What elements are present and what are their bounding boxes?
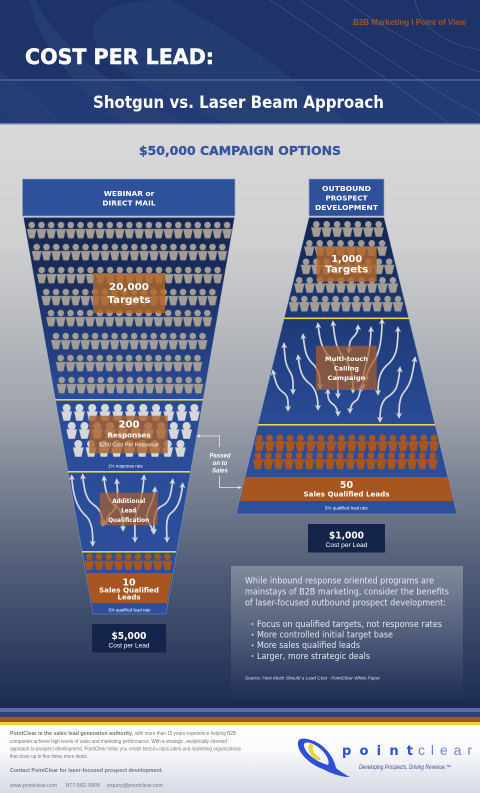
callout: 1,000 targets: 1,000 — [331, 254, 362, 265]
bullet list: Focus on qualified targets, not response rates — [257, 620, 442, 630]
callout: additional lead qualification — [100, 493, 158, 525]
label: B2B Marketing: B2B Marketing I Point of View — [353, 18, 467, 27]
subtitle: Shotgun vs. Laser Beam Approach — [93, 93, 384, 113]
about text: that close up to five times more deals. — [10, 754, 88, 760]
title: COST PER LEAD: — [25, 45, 214, 70]
heading: campaign options: $50,000 CAMPAIGN OPTIONS — [139, 144, 341, 158]
contact line: Contact PointClear for laser-focused prospect development. — [10, 768, 164, 774]
bullet list — [252, 620, 442, 662]
page background — [0, 124, 480, 714]
bullet list: More controlled initial target base — [257, 630, 393, 640]
band: 10 sales qualified leads — [86, 573, 172, 603]
bullet list: More sales qualified leads — [257, 641, 360, 651]
callout: additional lead qualification: Lead — [121, 508, 136, 514]
about text: PointClear is the sales lead generation authority, — [10, 731, 134, 737]
panel: recommendation text — [231, 566, 463, 698]
callout: additional lead qualification: Qualification — [108, 517, 149, 524]
panel: outbound prospect development funnel — [236, 179, 457, 514]
callout: 200 responses — [89, 416, 168, 453]
callout: multi-touch calling campaign: Campaign — [328, 374, 366, 382]
contact details: www.pointclear.com — [10, 783, 57, 789]
funnel header: webinar: WEBINAR or — [104, 189, 155, 198]
footer — [0, 700, 480, 793]
qualification arrows — [72, 475, 183, 545]
callout: 20,000 targets: 20,000 — [109, 282, 149, 293]
funnel header: webinar: DIRECT MAIL — [102, 198, 156, 208]
about text — [10, 731, 241, 760]
callout: passed on to sales: Sales — [212, 468, 228, 474]
about text: companies achieve high levels of sales and marketing performance. With a strategic, analytically oriented — [10, 739, 227, 745]
band: 10 sales qualified leads: 10 — [122, 578, 136, 588]
about text: with more than 15 years experience helping B2B — [135, 731, 237, 737]
callout: 200 responses: Responses — [108, 432, 150, 440]
funnel header: outbound: OUTBOUND — [322, 185, 372, 193]
callout: multi-touch calling campaign — [316, 346, 377, 390]
callout: 200 responses: 200 — [118, 420, 140, 430]
callout: multi-touch calling campaign: Multi-touch — [325, 355, 368, 363]
cost box: $5,000 — [92, 624, 166, 652]
contact details: inquiry@pointclear.com — [107, 783, 163, 789]
qualified crowd — [84, 553, 172, 571]
callout: 20,000 targets — [93, 273, 165, 313]
funnel header: webinar — [22, 179, 235, 216]
qualified rate: 5% qualified lead rate — [325, 506, 368, 512]
band: 50 sales qualified leads — [240, 477, 453, 501]
intro text: While inbound response oriented programs are — [245, 576, 434, 586]
funnel body — [236, 218, 457, 514]
logo wordmark: clear — [418, 742, 472, 758]
callout: passed on to sales: on to — [213, 461, 228, 467]
target crowd — [27, 222, 232, 395]
callout: 1,000 targets — [317, 247, 377, 282]
qualified rate: 5% qualified lead rate — [108, 608, 151, 614]
band: 50 sales qualified leads: 50 — [340, 480, 353, 491]
contact details — [10, 783, 163, 789]
header banner — [0, 0, 480, 124]
logo wordmark: point — [342, 744, 413, 759]
callout: 200 responses: $250 Cost Per Response — [99, 442, 159, 448]
band: 10 sales qualified leads: Leads — [118, 594, 140, 602]
callout: 20,000 targets: Targets — [108, 295, 151, 306]
logo tagline: Developing Prospects, Driving Revenue.™ — [359, 764, 451, 771]
band: 10 sales qualified leads: Sales Qualified — [99, 586, 159, 594]
callout: passed on to sales — [197, 436, 241, 488]
funnel header: outbound: PROSPECT — [326, 194, 368, 202]
logo — [298, 739, 472, 777]
cost box: $1,000: $1,000 — [329, 530, 364, 542]
cost box: $5,000: Cost per Lead — [108, 642, 150, 650]
callout: additional lead qualification: Additional — [112, 498, 145, 505]
about text: approach to prospect development, PointClear helps you create best-in-class sales and marketing organizations — [10, 746, 241, 752]
target crowd — [289, 221, 403, 314]
intro text: of laser-focused outbound prospect development: — [245, 598, 446, 608]
cost box: $5,000: $5,000 — [112, 631, 147, 642]
logo mark — [298, 739, 350, 777]
contact details: 877-582-9909 — [66, 783, 100, 789]
qualified crowd — [253, 435, 439, 470]
bullet list: Larger, more strategic deals — [257, 652, 370, 662]
cost box: $1,000 — [308, 524, 385, 552]
intro text — [245, 576, 449, 608]
logo wordmark — [342, 742, 472, 759]
response rate: 1% response rate — [108, 464, 143, 470]
cost box: $1,000: Cost per Lead — [326, 542, 368, 549]
intro text: mainstays of B2B marketing, consider the benefits — [245, 588, 449, 598]
calling arrows — [273, 320, 415, 421]
callout: 1,000 targets: Targets — [325, 264, 368, 276]
callout: multi-touch calling campaign: Calling — [334, 364, 359, 372]
source note: Source: How Much Should a Lead Cost - PointClear White Paper — [245, 676, 381, 680]
funnel body — [24, 218, 234, 614]
funnel header: outbound: DEVELOPMENT — [315, 204, 379, 212]
callout: passed on to sales: Passed — [209, 454, 231, 460]
band: 50 sales qualified leads: Sales Qualified Leads — [304, 490, 390, 498]
funnel header: outbound — [309, 179, 384, 216]
response crowd — [60, 404, 201, 458]
panel: webinar or direct mail funnel — [22, 179, 235, 614]
